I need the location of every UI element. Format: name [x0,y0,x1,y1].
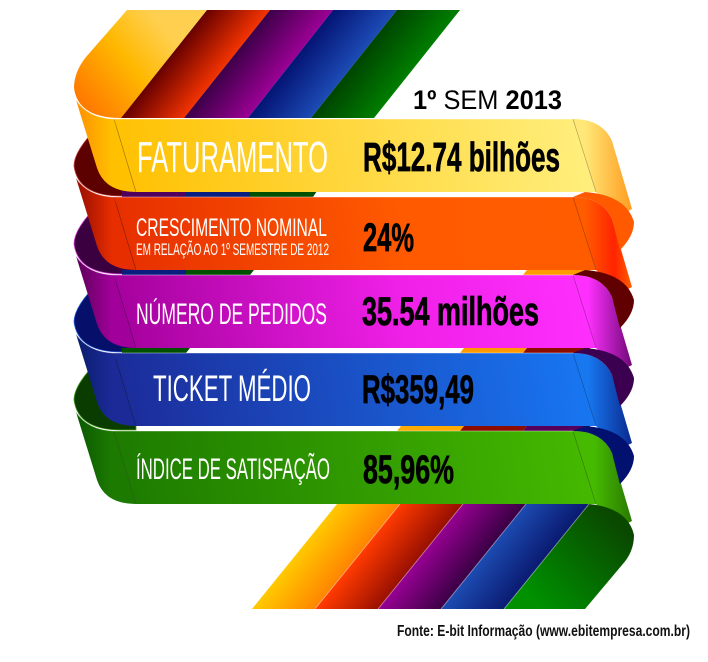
right folded loops [573,192,634,484]
band: ticket médio [76,334,632,449]
band: número de pedidos [76,256,632,371]
value: 85,96%: 85,96% [363,448,454,492]
value: 35.54 milhões: 35.54 milhões [362,290,539,334]
band: faturamento [76,100,632,215]
label: ticket médio: TICKET MÉDIO [153,368,311,409]
label: índice de satisfação: ÍNDICE DE SATISFAÇÃO [136,452,330,486]
value: R$359,49: R$359,49 [362,368,474,412]
sublabel: em relação ao 1º semestre de 2012: EM RELAÇÃO AO 1º SEMESTRE DE 2012 [136,239,329,259]
value: 24%: 24% [363,216,414,260]
band: índice de satisfação [76,412,632,527]
top striped ribbon [74,10,460,118]
label: crescimento nominal: CRESCIMENTO NOMINAL [136,214,327,242]
label: faturamento: FATURAMENTO [137,133,328,182]
label: número de pedidos: NÚMERO DE PEDIDOS [136,298,327,331]
value: R$12.74 bilhões: R$12.74 bilhões [363,134,560,180]
left folded loops [74,125,136,430]
bottom striped ribbon [252,504,634,609]
period heading: 1º SEM 2013 [413,85,562,115]
band: crescimento nominal [76,178,632,293]
stripes visible in the gaps [122,191,590,431]
